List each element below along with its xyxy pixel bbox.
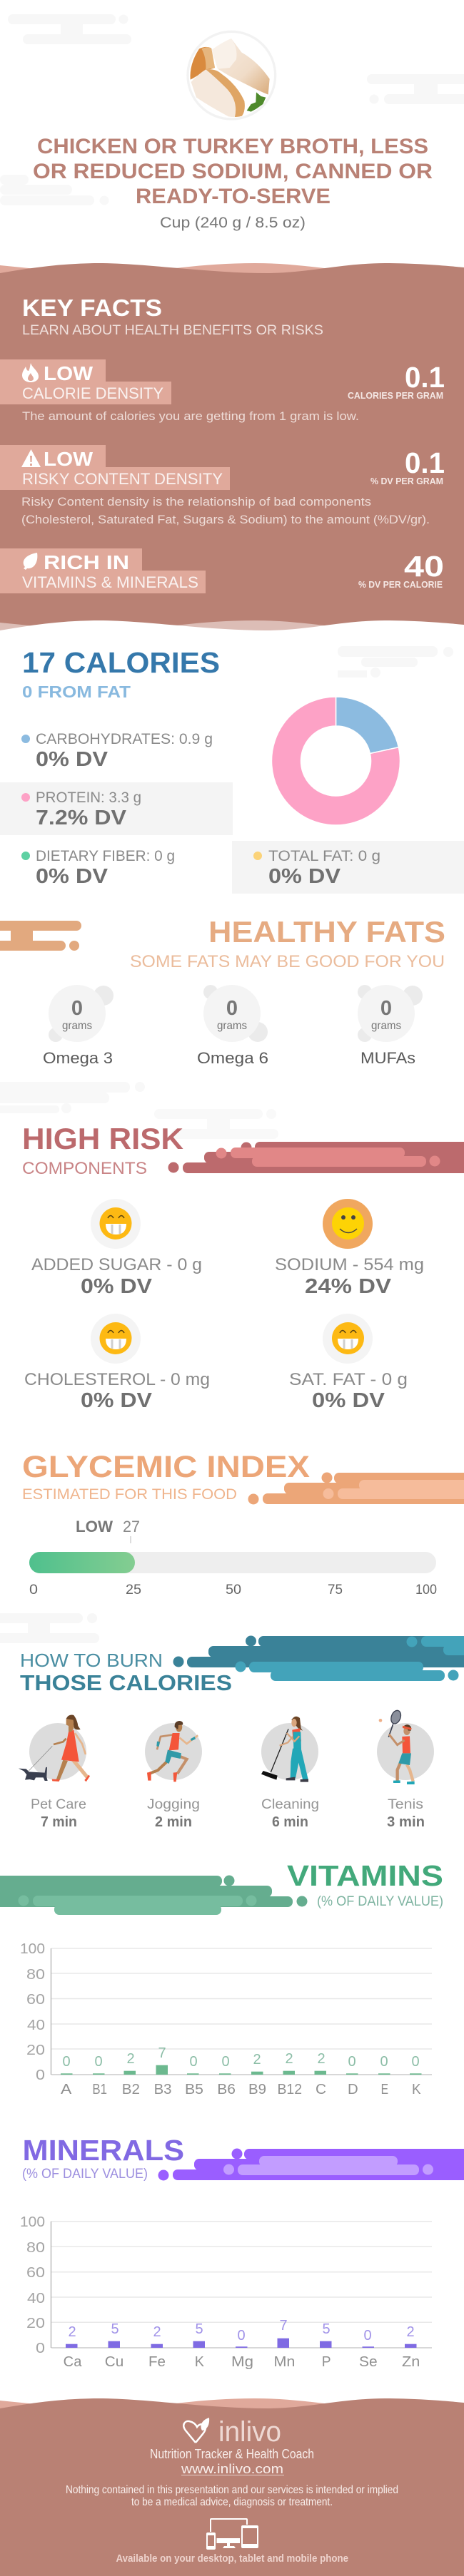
bar chart: vitamins: C bbox=[316, 2082, 326, 2097]
panel: minerals bbox=[20, 2134, 464, 2370]
risk item: sodium: 24% DV bbox=[305, 1275, 392, 1298]
heading: glycemic index: ESTIMATED FOR THIS FOOD bbox=[22, 1486, 237, 1503]
bar chart: minerals: 5 bbox=[111, 2321, 119, 2337]
activity: tennis: Tenis bbox=[388, 1797, 423, 1812]
activity: pet care: 7 min bbox=[41, 1814, 77, 1830]
bar chart: minerals: Cu bbox=[105, 2354, 123, 2370]
activity: cleaning: 6 min bbox=[272, 1814, 308, 1830]
title: OR REDUCED SODIUM, CANNED OR bbox=[33, 160, 433, 183]
title: READY-TO-SERVE bbox=[136, 185, 331, 208]
bar chart: minerals: 5 bbox=[322, 2321, 331, 2337]
bar chart: vitamins: 0 bbox=[94, 2054, 103, 2070]
stat: omega 6 bbox=[197, 985, 268, 1067]
row: total fat bbox=[232, 841, 464, 894]
bar chart: vitamins: A bbox=[61, 2082, 72, 2097]
heading: high risk: COMPONENTS bbox=[22, 1159, 147, 1178]
risk item: added sugar: 0% DV bbox=[81, 1275, 153, 1298]
availability note: Available on your desktop, tablet and mobile phone bbox=[116, 2552, 348, 2565]
stat: omega 6: grams bbox=[217, 1020, 247, 1032]
heading: key facts bbox=[22, 295, 323, 338]
icon: grinning face bbox=[100, 1207, 131, 1240]
bar chart: minerals: 2 bbox=[153, 2324, 161, 2340]
icon: grinning face bbox=[332, 1322, 364, 1354]
fact: risky content density: RISKY CONTENT DENSITY bbox=[22, 470, 223, 488]
disclaimer bbox=[66, 2484, 398, 2508]
heading: healthy fats: HEALTHY FATS bbox=[208, 915, 445, 949]
icon: grinning face bbox=[100, 1322, 131, 1354]
stat: mufas: 0 bbox=[380, 997, 392, 1020]
activity: pet care bbox=[19, 1715, 90, 1830]
bar chart: vitamins: 2 bbox=[253, 2052, 261, 2068]
bar chart: minerals: 40 bbox=[27, 2291, 45, 2306]
bar chart: minerals: 7 bbox=[279, 2318, 288, 2334]
icon: leaf bbox=[24, 553, 37, 570]
heading: burn: THOSE CALORIES bbox=[20, 1670, 232, 1695]
bar chart: vitamins: 2 bbox=[126, 2051, 135, 2067]
website link: www.inlivo.com bbox=[181, 2462, 283, 2476]
fact: risky content density: % DV PER GRAM bbox=[370, 476, 443, 486]
panel: high risk components bbox=[22, 1122, 464, 1412]
illustration: woman walking dog bbox=[19, 1715, 90, 1782]
risk item: added sugar: ADDED SUGAR - 0 g bbox=[31, 1255, 202, 1274]
bar chart: vitamins: 0 bbox=[189, 2054, 198, 2070]
activity: tennis: 3 min bbox=[387, 1814, 425, 1830]
fact: calorie density bbox=[0, 359, 445, 423]
risk item: cholesterol: CHOLESTEROL - 0 mg bbox=[24, 1370, 210, 1389]
stat: omega 6: 0 bbox=[226, 997, 238, 1020]
disclaimer: to be a medical advice, diagnosis or treatment. bbox=[131, 2496, 333, 2508]
panel: glycemic index bbox=[22, 1450, 464, 1598]
row: protein: 7.2% DV bbox=[36, 807, 127, 829]
bar chart: vitamins: 0 bbox=[221, 2054, 230, 2070]
stat: mufas bbox=[358, 985, 423, 1067]
fact: risky content density: 0.1 bbox=[405, 446, 445, 479]
bar chart: minerals bbox=[20, 2214, 432, 2370]
bar chart: minerals: Ca bbox=[64, 2354, 82, 2370]
bar chart: vitamins: 100 bbox=[20, 1941, 45, 1957]
heading: high risk bbox=[22, 1122, 183, 1178]
bar chart: vitamins: 7 bbox=[158, 2045, 166, 2061]
fact: rich in vitamins and minerals: VITAMINS & MINERALS bbox=[22, 573, 198, 591]
activity: jogging: Jogging bbox=[147, 1797, 200, 1812]
activity: cleaning: Cleaning bbox=[261, 1797, 319, 1812]
bar chart: minerals: 80 bbox=[26, 2240, 45, 2256]
fact: risky content density bbox=[0, 445, 445, 526]
illustration: jogger bbox=[147, 1721, 198, 1782]
bar chart: minerals: Zn bbox=[402, 2354, 420, 2370]
heading: vitamins: (% OF DAILY VALUE) bbox=[317, 1893, 443, 1909]
decorative cloud: top left bbox=[8, 14, 131, 44]
panel: footer bbox=[0, 2398, 464, 2576]
decorative blob: orange bbox=[0, 921, 81, 951]
bar chart: minerals: Mg bbox=[231, 2354, 253, 2370]
decorative cloud: left of title bbox=[0, 175, 109, 205]
activity: jogging: 2 min bbox=[155, 1814, 192, 1830]
panel: calories and macronutrients bbox=[0, 646, 464, 894]
icon: devices bbox=[206, 2518, 258, 2550]
heading: minerals bbox=[22, 2134, 184, 2182]
bar chart: vitamins: 2 bbox=[317, 2051, 326, 2067]
serving size: Cup (240 g / 8.5 oz) bbox=[160, 215, 306, 231]
bar chart: vitamins: 0 bbox=[62, 2054, 71, 2070]
risk item: sodium: SODIUM - 554 mg bbox=[275, 1255, 424, 1274]
illustration: person sweeping bbox=[261, 1717, 308, 1782]
decorative cloud: above high risk, centre bbox=[154, 1109, 278, 1139]
disclaimer: Nothing contained in this presentation and our services is intended or implied bbox=[66, 2484, 398, 2496]
fact: risky content density: Risky Content density is the relationship of bad components bbox=[21, 495, 371, 508]
bar chart: vitamins: B9 bbox=[248, 2082, 266, 2097]
row: carbohydrates bbox=[21, 731, 213, 771]
bar chart: minerals: 60 bbox=[26, 2265, 45, 2281]
row: dietary fiber: DIETARY FIBER: 0 g bbox=[36, 848, 175, 864]
activity: pet care: Pet Care bbox=[31, 1797, 86, 1812]
heading: burn: HOW TO BURN bbox=[20, 1650, 163, 1671]
logo wordmark: inlivo bbox=[218, 2416, 281, 2448]
bar chart: vitamins: 80 bbox=[26, 1967, 45, 1983]
risk item: sodium bbox=[275, 1199, 424, 1298]
fact: rich in vitamins and minerals bbox=[0, 548, 444, 593]
heading: key facts: KEY FACTS bbox=[22, 295, 162, 321]
fact: calorie density: CALORIE DENSITY bbox=[22, 384, 163, 402]
bar chart: minerals: Se bbox=[359, 2354, 378, 2370]
bar chart: minerals: 20 bbox=[26, 2316, 45, 2331]
heading: calories: 0 FROM FAT bbox=[22, 683, 131, 701]
gauge axis: 0 bbox=[29, 1583, 38, 1598]
stat: mufas: MUFAs bbox=[360, 1049, 415, 1067]
heading: key facts: LEARN ABOUT HEALTH BENEFITS OR RISKS bbox=[22, 322, 323, 338]
heading: glycemic index: GLYCEMIC INDEX bbox=[22, 1450, 310, 1484]
bar chart: vitamins: K bbox=[412, 2082, 421, 2097]
fact: rich in vitamins and minerals: 40 bbox=[404, 550, 444, 583]
icon: warning triangle bbox=[21, 449, 41, 467]
decorative cloud: above high risk, left bbox=[0, 1082, 145, 1113]
gauge axis: 50 bbox=[226, 1583, 241, 1598]
bar chart: vitamins: E bbox=[381, 2082, 388, 2097]
stat: mufas: grams bbox=[371, 1020, 401, 1032]
heading: vitamins bbox=[287, 1859, 443, 1909]
risk item: cholesterol bbox=[24, 1314, 210, 1412]
risk item: added sugar bbox=[31, 1199, 202, 1298]
heading: high risk: HIGH RISK bbox=[22, 1122, 183, 1155]
bar chart: minerals: 100 bbox=[20, 2214, 45, 2230]
gauge value: LOW bbox=[76, 1518, 113, 1535]
bar chart: vitamins: 40 bbox=[27, 2018, 45, 2033]
stat: omega 3 bbox=[43, 985, 114, 1067]
bar chart: minerals: K bbox=[195, 2354, 205, 2370]
decorative cloud: calories bbox=[338, 646, 453, 678]
decorative blob: red bbox=[168, 1142, 464, 1173]
gauge value: 27 bbox=[123, 1518, 140, 1535]
row: total fat: 0% DV bbox=[268, 865, 341, 888]
icon: flame bbox=[22, 363, 39, 382]
icon: smiling face bbox=[332, 1207, 364, 1240]
heading: glycemic index bbox=[22, 1450, 310, 1503]
bar chart: minerals: 0 bbox=[363, 2328, 372, 2344]
bar chart: vitamins: 0 bbox=[36, 2068, 45, 2083]
risk item: saturated fat: SAT. FAT - 0 g bbox=[289, 1370, 408, 1389]
stat: omega 6: Omega 6 bbox=[197, 1049, 268, 1067]
bar chart: vitamins: B2 bbox=[122, 2082, 140, 2097]
bar chart: vitamins: B6 bbox=[217, 2082, 236, 2097]
heading: calories: 17 CALORIES bbox=[22, 646, 220, 679]
bar chart: minerals: P bbox=[322, 2354, 331, 2370]
heading: vitamins: VITAMINS bbox=[287, 1859, 443, 1892]
bar chart: vitamins: 60 bbox=[26, 1992, 45, 2008]
heading: healthy fats: SOME FATS MAY BE GOOD FOR YOU bbox=[130, 952, 445, 971]
panel: key facts bbox=[0, 263, 464, 642]
activity: tennis bbox=[377, 1709, 434, 1830]
bar chart: vitamins: 0 bbox=[380, 2054, 388, 2070]
bar chart: vitamins: D bbox=[348, 2082, 358, 2097]
title bbox=[33, 135, 433, 208]
stat: omega 3: 0 bbox=[71, 997, 83, 1020]
fact: calorie density: LOW bbox=[44, 362, 94, 384]
fact: risky content density: LOW bbox=[44, 448, 94, 470]
decorative blob: teal bbox=[173, 1636, 464, 1681]
stat: omega 3: Omega 3 bbox=[43, 1049, 113, 1067]
bar chart: vitamins: B5 bbox=[185, 2082, 203, 2097]
bar chart: vitamins bbox=[20, 1941, 432, 2097]
panel: vitamins bbox=[0, 1859, 443, 2097]
bar chart: vitamins: B1 bbox=[92, 2082, 107, 2097]
gauge bar bbox=[29, 1552, 436, 1573]
bar chart: vitamins: B3 bbox=[154, 2082, 171, 2097]
gauge axis: 25 bbox=[126, 1583, 141, 1598]
bar chart: vitamins: 20 bbox=[26, 2043, 45, 2058]
bar chart: minerals: 5 bbox=[195, 2321, 203, 2337]
gauge axis: 75 bbox=[328, 1583, 343, 1598]
stat: omega 3: grams bbox=[62, 1020, 92, 1032]
donut chart bbox=[271, 697, 400, 825]
row: carbohydrates: 0% DV bbox=[36, 748, 109, 771]
bar chart: minerals: 0 bbox=[36, 2341, 45, 2356]
bar chart: vitamins: B12 bbox=[277, 2082, 302, 2097]
heading: minerals: MINERALS bbox=[23, 2134, 184, 2167]
risk item: saturated fat: 0% DV bbox=[312, 1389, 385, 1412]
risk item: saturated fat bbox=[289, 1314, 408, 1412]
bar chart: vitamins: 0 bbox=[411, 2054, 420, 2070]
gauge value bbox=[76, 1518, 140, 1543]
bar chart: minerals: 2 bbox=[68, 2324, 76, 2340]
heading: calories bbox=[22, 646, 220, 701]
bar chart: vitamins: 0 bbox=[348, 2054, 356, 2070]
panel: healthy fats bbox=[0, 915, 445, 1067]
fact: calorie density: 0.1 bbox=[405, 361, 445, 394]
row: dietary fiber: 0% DV bbox=[36, 865, 109, 888]
bar chart: vitamins: 2 bbox=[285, 2051, 293, 2067]
bar chart: minerals: Fe bbox=[148, 2354, 166, 2370]
fact: risky content density: (Cholesterol, Saturated Fat, Sugars & Sodium) to the amount (%DV/gr). bbox=[21, 513, 430, 526]
panel: how to burn those calories bbox=[19, 1636, 464, 1830]
row: dietary fiber bbox=[21, 848, 175, 888]
food photo: chicken slices in a ring bbox=[188, 31, 276, 119]
heading: minerals: (% OF DAILY VALUE) bbox=[22, 2166, 148, 2182]
fact: rich in vitamins and minerals: RICH IN bbox=[44, 551, 129, 573]
activity: jogging bbox=[145, 1721, 202, 1830]
decorative blob: green bbox=[0, 1876, 307, 1915]
heading: burn bbox=[20, 1650, 232, 1695]
gauge axis: 100 bbox=[415, 1583, 437, 1598]
row: carbohydrates: CARBOHYDRATES: 0.9 g bbox=[36, 731, 213, 747]
decorative cloud: top right bbox=[367, 74, 464, 104]
activity: cleaning bbox=[261, 1717, 319, 1830]
decorative cloud: burn section bbox=[0, 1613, 99, 1643]
heading: healthy fats bbox=[130, 915, 445, 971]
tagline: Nutrition Tracker & Health Coach bbox=[150, 2447, 314, 2461]
fact: rich in vitamins and minerals: % DV PER CALORIE bbox=[358, 579, 443, 590]
row: protein: PROTEIN: 3.3 g bbox=[36, 789, 141, 806]
bar chart: minerals: Mn bbox=[274, 2354, 295, 2370]
gauge axis bbox=[29, 1583, 437, 1598]
bar chart: minerals: 2 bbox=[406, 2324, 415, 2340]
decorative blob: purple bbox=[158, 2148, 464, 2181]
title: CHICKEN OR TURKEY BROTH, LESS bbox=[37, 135, 428, 158]
bar chart: minerals: 0 bbox=[237, 2328, 246, 2344]
logo: inlivo heart bbox=[183, 2418, 209, 2443]
risk item: cholesterol: 0% DV bbox=[81, 1389, 153, 1412]
row: protein bbox=[0, 782, 233, 835]
illustration: tennis player bbox=[379, 1709, 415, 1784]
fact: calorie density: The amount of calories you are getting from 1 gram is low. bbox=[22, 409, 359, 423]
decorative blob: orange bbox=[248, 1472, 464, 1505]
row: total fat: TOTAL FAT: 0 g bbox=[268, 848, 380, 864]
fact: calorie density: CALORIES PER GRAM bbox=[348, 390, 443, 401]
